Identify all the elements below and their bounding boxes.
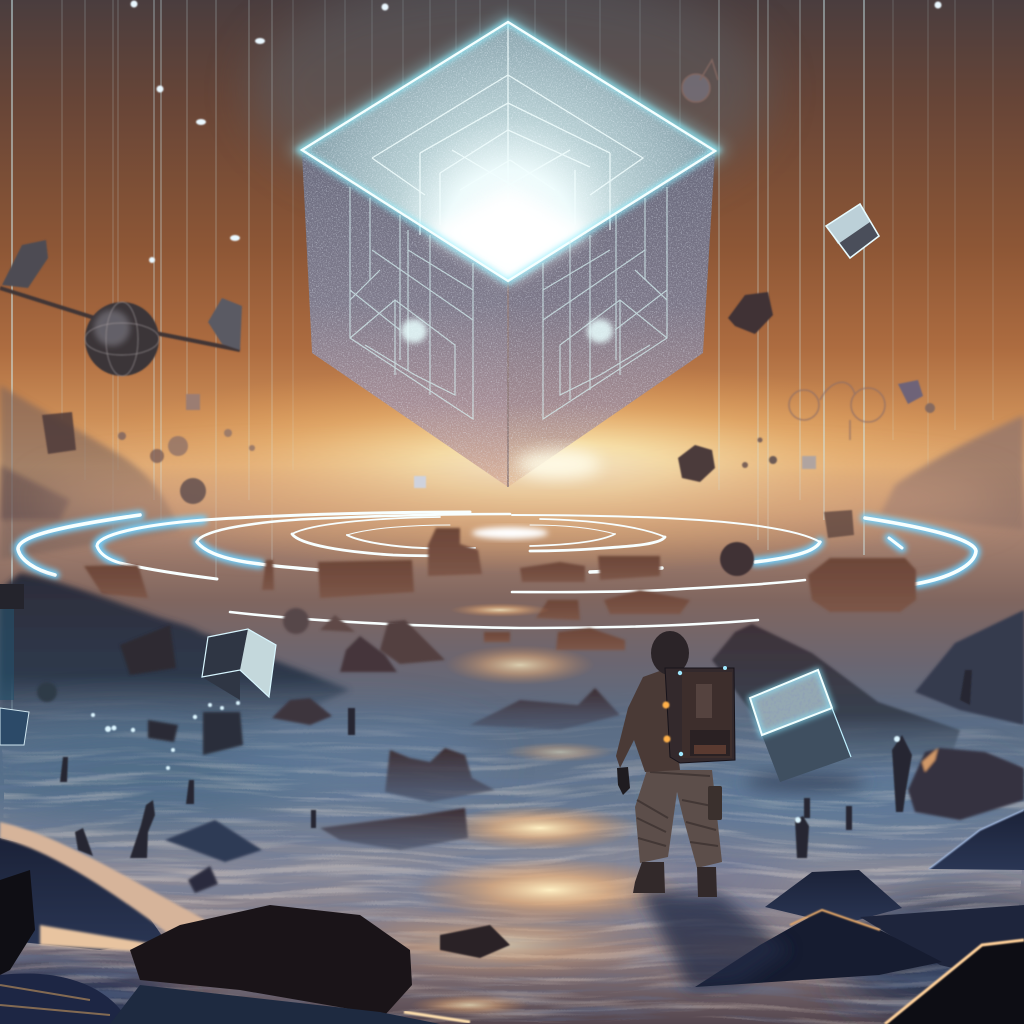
energy rings (18, 512, 976, 628)
astronaut legs (635, 770, 722, 868)
distant dunes (0, 385, 1024, 560)
foreground boulders (0, 870, 510, 1024)
small floating cube, upper right (826, 204, 879, 258)
cube glow halo (300, 22, 717, 282)
vertical light beams (12, 0, 993, 730)
astronaut helmet (651, 631, 689, 675)
top face speckle (300, 22, 717, 282)
blue sand shading (0, 720, 1024, 1024)
suit lights (662, 702, 670, 708)
ring glow (18, 515, 976, 584)
tilted cube, right (745, 670, 865, 792)
astronaut glove (617, 767, 630, 795)
distant probes (682, 60, 885, 440)
right face energy node (587, 319, 613, 343)
light sand streaks (0, 680, 1024, 1024)
floating spark lights (130, 0, 942, 263)
cube speckle texture (302, 152, 715, 487)
cube edge shading (507, 282, 509, 487)
ring centre glow (472, 527, 548, 539)
left face energy node (401, 319, 427, 343)
midground rocks, left (37, 608, 620, 893)
golden light pools on sand (340, 603, 910, 1015)
corner rock (885, 940, 1024, 1024)
utility pouch (708, 786, 722, 820)
dark sand streaks (14, 836, 1004, 1024)
astronaut (616, 631, 790, 990)
midground hill behind astronaut (712, 624, 960, 775)
foreground right dunes (695, 810, 1024, 987)
right face circuitry (543, 187, 667, 419)
cube left face (302, 152, 508, 487)
small ground lights (91, 701, 900, 823)
astronaut shadow (640, 890, 790, 990)
sand streak textures (0, 680, 1024, 1024)
floating rocks and debris (42, 292, 935, 576)
left dark hillside (0, 573, 350, 745)
ring lines (18, 512, 976, 628)
cube core glow (428, 190, 590, 280)
small distant figures (60, 670, 972, 858)
inner frames on top face (372, 22, 643, 235)
cool haze behind cube top (250, 0, 770, 210)
sun flare under cube (516, 450, 600, 478)
tilted cube, left (202, 629, 276, 700)
cube right face (508, 152, 715, 487)
astronaut torso and arm (616, 668, 680, 772)
flying satellite (0, 240, 242, 376)
astronaut boots (633, 862, 665, 893)
background ruins (84, 528, 916, 650)
main floating cube (300, 22, 717, 487)
horizon glow (45, 363, 1024, 573)
cube top face (300, 22, 717, 282)
backpack (665, 668, 735, 763)
warm mid-ground haze (40, 465, 1000, 535)
left edge panels and crates (0, 584, 29, 745)
glowing cube outline (300, 22, 717, 282)
right midground hills (908, 610, 1024, 820)
foreground left dunes (0, 822, 215, 1024)
left face circuitry (350, 187, 473, 419)
